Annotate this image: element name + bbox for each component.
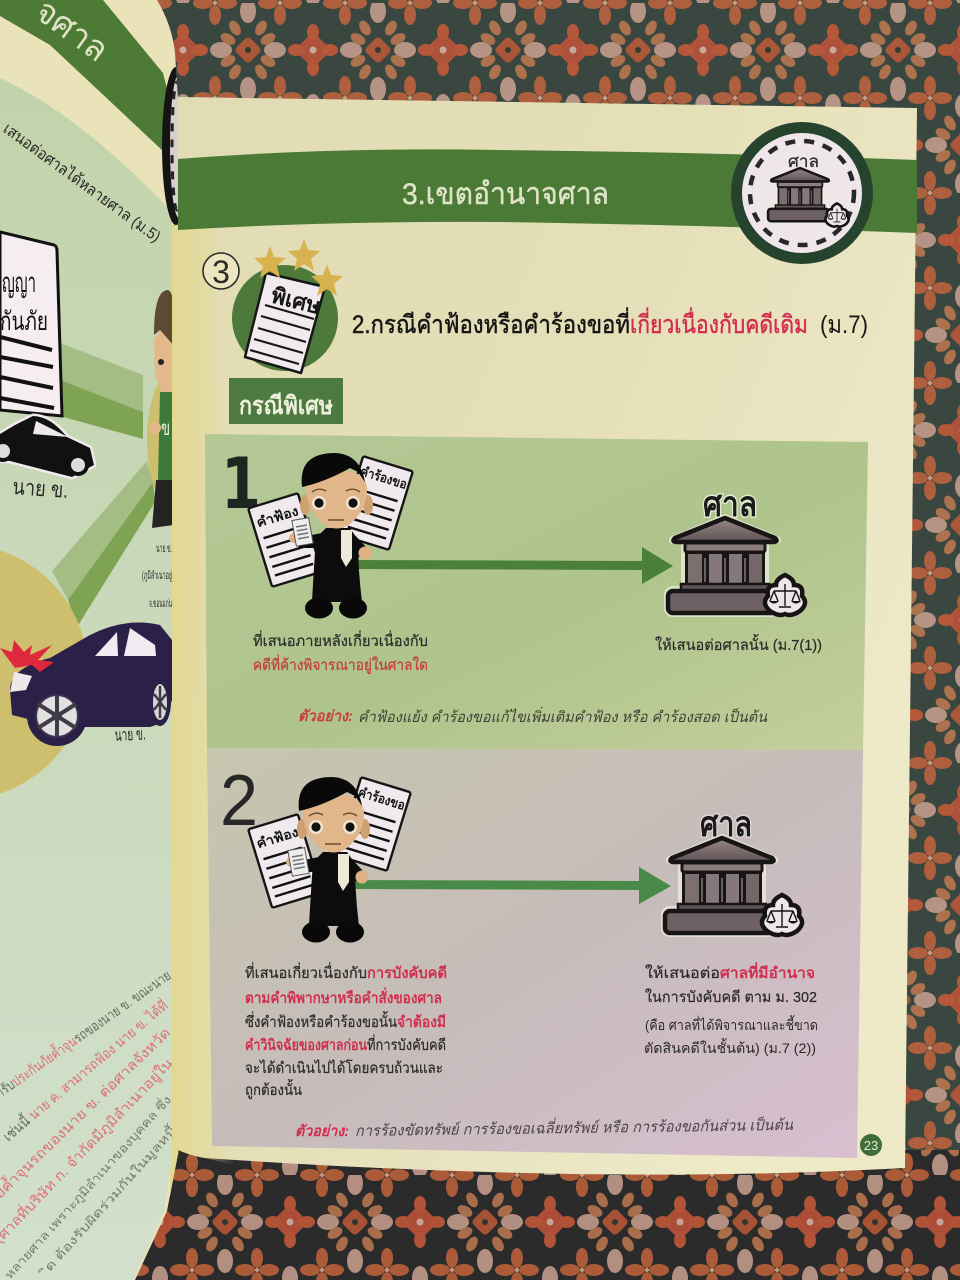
document: plaint — [248, 814, 322, 908]
icon: court building — [668, 485, 805, 615]
left page navy car with crash burst — [0, 623, 172, 746]
document: plaint: คำฟ้อง — [255, 824, 300, 851]
text: case 1 example: ตัวอย่าง: — [298, 708, 353, 725]
text: case 2 court: ศาลที่มีอำนาจ — [720, 962, 815, 982]
left page circle emblem edge — [162, 67, 178, 225]
number 1: 1 — [221, 443, 261, 525]
panel: right page of open book — [172, 97, 917, 1175]
left page green arrows upper — [60, 343, 143, 439]
icon: special document with stars — [232, 239, 343, 373]
text: case 2 condition: ที่เสนอเกี่ยวเนื่องกับ — [245, 962, 367, 982]
character: lawyer in black robe — [289, 453, 373, 618]
text: case 2 example: ตัวอย่าง: — [295, 1123, 349, 1140]
icon: court emblem in header: ศาล — [788, 152, 819, 171]
document: petition: คำร้องขอ — [359, 463, 409, 492]
arrow to court — [355, 547, 673, 584]
number 2: 2 — [220, 761, 258, 841]
text: case 2 condition: คำวินิจฉัยของศาลก่อน — [245, 1036, 368, 1054]
number marker 3: 3 — [212, 254, 230, 290]
left page light green panel — [0, 78, 172, 1280]
label: special case: กรณีพิเศษ — [239, 392, 333, 420]
document: plaint: คำฟ้อง — [255, 503, 300, 530]
document: petition — [337, 777, 411, 871]
text: case 2 condition: ถูกต้องนั้น — [245, 1079, 302, 1099]
page number: 23 — [864, 1138, 878, 1153]
text: case 1 example: คำฟ้องแย้ง คำร้องขอแก้ไขเพิ่มเติมคำฟ้อง หรือ คำร้องสอด เป็นต้น — [358, 706, 768, 726]
heading: related to original case: (ม.7) — [820, 311, 868, 339]
icon: special document with stars: พิเศษ — [269, 283, 324, 319]
text: case 2 court: ตัดสินคดีในชั้นต้น) (ม.7 (2)) — [644, 1038, 816, 1056]
panel: case 2 purple — [207, 748, 863, 1158]
left page label: car owner: นาย ข. — [12, 474, 69, 503]
text: case 2 court: ให้เสนอต่อ — [645, 964, 720, 982]
heading: related to original case — [352, 307, 868, 339]
number marker 3 — [203, 253, 239, 290]
left page person in green shirt — [147, 290, 172, 528]
left page bottom text: เช่นนี้ นาย ค. สามารถฟ้อง นาย ข. ได้ที่ — [0, 996, 171, 1144]
left page bottom text — [0, 965, 181, 1280]
icon: court emblem in header — [731, 122, 873, 264]
text: case 2 court — [644, 962, 818, 1056]
text: case 2 condition: จะได้ดำเนินไปได้โดยครบถ้วนและ — [245, 1059, 443, 1077]
character: lawyer in black robe — [286, 777, 370, 942]
title band — [178, 149, 917, 233]
panel: left page of open book — [0, 0, 193, 1280]
text: case 2 condition — [245, 962, 447, 1099]
text: case 2 condition: การบังคับคดี — [367, 965, 447, 982]
text: case 2 example: การร้องขัดทรัพย์ การร้องขอเฉลี่ยทรัพย์ หรือ การร้องขอกันส่วน เป็นต้น — [355, 1114, 794, 1140]
icon: court building: ศาล — [700, 805, 752, 844]
left page bottom text: ิด ต้องรับผิดร่วมกันในมูลหนี้ — [34, 1122, 181, 1280]
text: case 2 court: ในการบังคับคดี ตาม ม. 302 — [645, 988, 817, 1006]
label: special case — [229, 378, 343, 424]
panel: left page of open book: จ.ขอนแก่น — [149, 598, 172, 610]
page number — [860, 1134, 882, 1156]
text: case 1 condition: คดีที่ค้างพิจารณาอยู่ในศาลใด — [253, 654, 428, 674]
left page contract document — [0, 232, 62, 416]
text: case 1 condition — [253, 630, 428, 674]
left page contract document: กันภัย — [0, 306, 48, 336]
icon: court building — [665, 805, 802, 935]
icon: court building: ศาล — [703, 485, 757, 524]
text: case 1 court: ให้เสนอต่อศาลนั้น (ม.7(1)) — [655, 634, 822, 654]
left page yellow circle — [0, 544, 88, 800]
document: plaint — [248, 493, 322, 587]
title text: 3.เขตอำนาจศาล — [402, 178, 609, 211]
left page top text: เสนอต่อศาลได้หลายศาล (ม.5) — [0, 119, 165, 246]
text: case 1 condition: ที่เสนอภายหลังเกี่ยวเนื่องกับ — [253, 630, 428, 650]
left page black car — [0, 416, 94, 477]
heading: related to original case: 2.กรณีคำฟ้องหรือคำร้องขอที่ — [352, 307, 630, 339]
left page contract document: ญญา — [2, 267, 36, 298]
left page green arrows lower — [52, 461, 155, 627]
panel: case 1 green — [205, 434, 868, 750]
left page green title band — [0, 0, 175, 230]
panel: left page of open book: นาย ข. — [156, 543, 172, 555]
text: case 2 condition: ตามคำพิพากษาหรือคำสั่งของศาล — [245, 987, 442, 1007]
panel: left page of open book: (ภูมิลำเนาอยู่ — [142, 570, 172, 582]
heading: related to original case: เกี่ยวเนื่องกับคดีเดิม — [630, 307, 808, 339]
text: case 2 condition: ซึ่งคำฟ้องหรือคำร้องขอนั้น — [245, 1011, 397, 1031]
text: case 2 court: (คือ ศาลที่ได้พิจารณาและชี้ขาด — [645, 1015, 818, 1033]
document: petition: คำร้องขอ — [357, 784, 407, 813]
left page person in green shirt: ข — [161, 418, 170, 440]
left page person label — [142, 543, 172, 610]
arrow to court — [351, 867, 671, 904]
text: case 2 condition: จำต้องมี — [397, 1014, 446, 1031]
left page bottom text: หลายศาล เพราะภูมิลำเนาของบุคคล ซึ่ง — [0, 1091, 175, 1280]
left page label: car: นาย ข. — [114, 724, 146, 745]
text: case 2 condition: ที่การบังคับคดี — [367, 1034, 446, 1054]
document: petition — [339, 456, 413, 550]
